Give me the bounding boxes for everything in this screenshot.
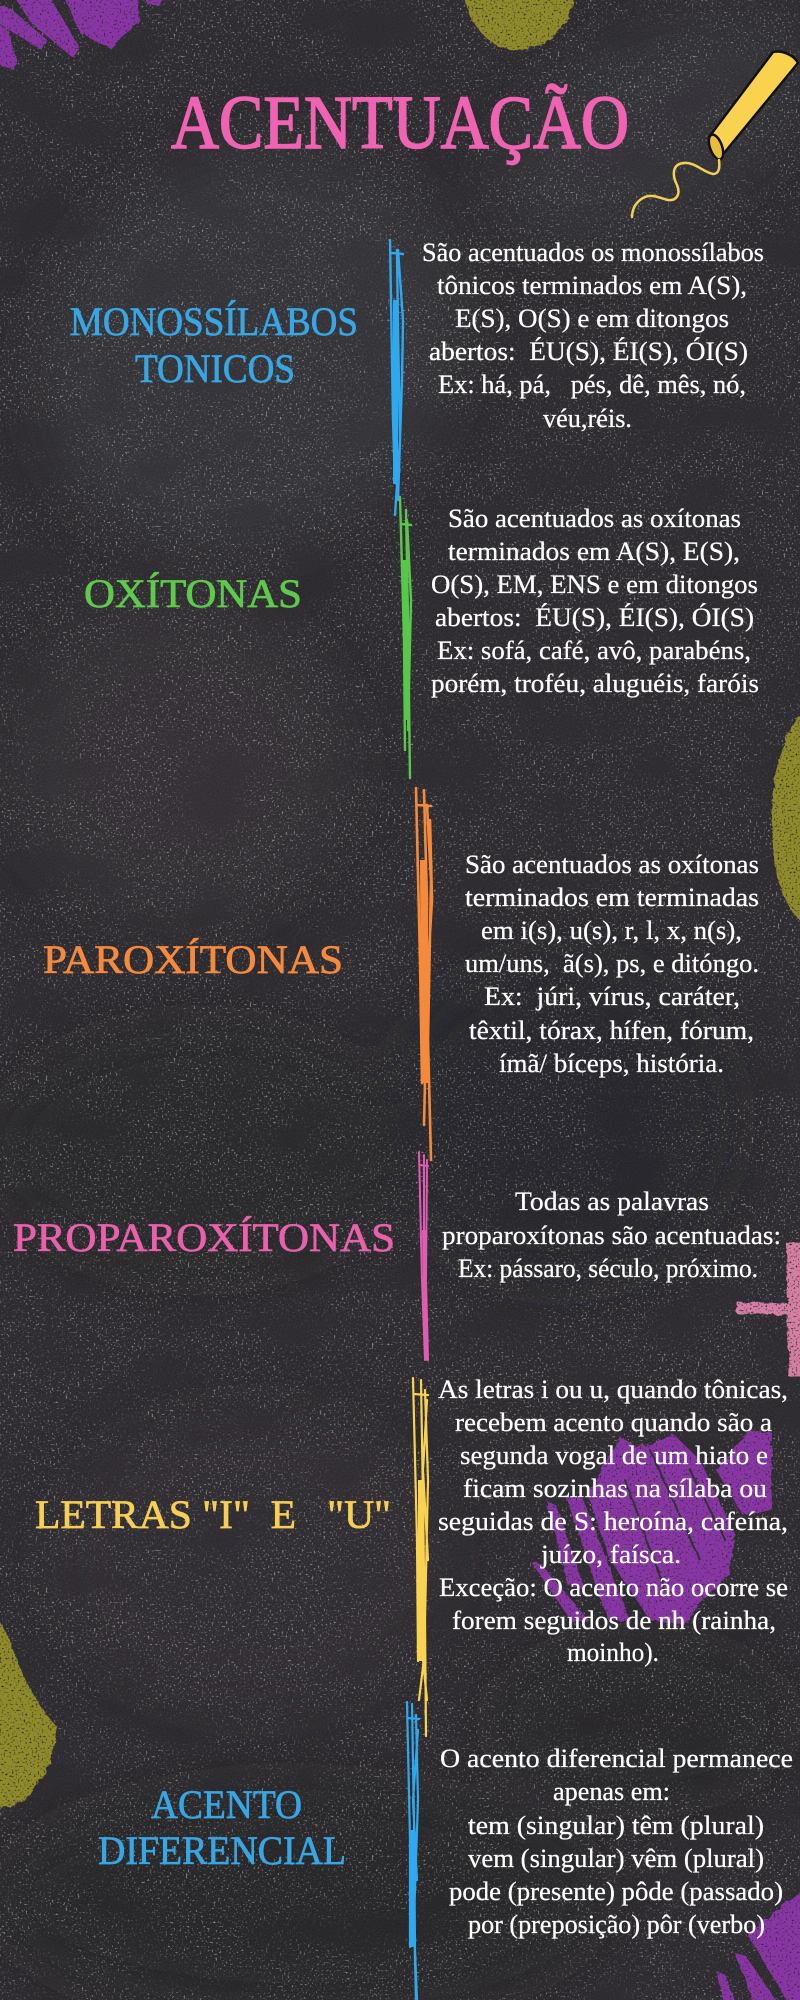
text block: monossílabos: véu,réis.: [543, 404, 632, 433]
text block: paroxítonas: um/uns, ã(s), ps, e ditóngo.: [465, 949, 759, 978]
decoration: purple chalk scribble top left: [0, 0, 165, 70]
text block: paroxítonas: Ex: júri, vírus, caráter,: [484, 982, 740, 1011]
heading: paroxítonas: PAROXÍTONAS: [43, 937, 343, 982]
text block: letras i e u: seguidas de S: heroína, cafeína,: [438, 1507, 788, 1536]
text block: paroxítonas: têxtil, tórax, hífen, fórum,: [469, 1016, 754, 1045]
decoration: purple chalk scribble bottom right: [717, 1890, 800, 2000]
divider: blue chalk line: [390, 240, 403, 515]
text block: letras i e u: Exceção: O acento não ocorre se: [439, 1573, 788, 1602]
text block: oxítonas: terminados em A(S), E(S),: [448, 537, 740, 566]
text block: acento diferencial: apenas em:: [553, 1777, 670, 1806]
text block: acento diferencial: tem (singular) têm (plural): [468, 1811, 764, 1840]
text block: monossílabos: [422, 238, 764, 433]
text block: paroxítonas: São acentuados as oxítonas: [465, 850, 759, 879]
text block: acento diferencial: O acento diferencial permanece: [440, 1744, 793, 1773]
heading: monossílabos tônicos: [70, 299, 358, 391]
text block: monossílabos: São acentuados os monossílabos: [422, 238, 764, 267]
heading: monossílabos tônicos: TONICOS: [135, 346, 295, 391]
heading: proparoxítonas: PROPAROXÍTONAS: [13, 1215, 395, 1260]
text block: oxítonas: São acentuados as oxítonas: [448, 504, 741, 533]
heading: acento diferencial: DIFERENCIAL: [98, 1828, 346, 1873]
text block: oxítonas: porém, troféu, aluguéis, faróis: [431, 669, 759, 698]
heading: acento diferencial: [98, 1782, 346, 1873]
section: acento diferencial: [98, 1702, 793, 2000]
text block: oxítonas: O(S), EM, ENS e em ditongos: [431, 570, 758, 599]
text block: oxítonas: Ex: sofá, café, avô, parabéns,: [437, 636, 751, 665]
section: oxítonas: [84, 497, 759, 778]
text block: oxítonas: [431, 504, 759, 698]
text block: proparoxítonas: proparoxítonas são acentuadas:: [442, 1221, 781, 1250]
heading: letras i e u: LETRAS "I" E "U": [35, 1492, 391, 1537]
decoration: purple chalk scribble centre: [532, 1430, 772, 1625]
text block: letras i e u: moinho).: [567, 1638, 659, 1667]
section: monossílabos tônicos: [70, 238, 764, 515]
divider: green chalk line: [400, 497, 411, 778]
text block: letras i e u: ficam sozinhas na sílaba ou: [463, 1474, 767, 1503]
decoration: pink chalk plus: [737, 1243, 800, 1377]
heading: acento diferencial: ACENTO: [151, 1782, 302, 1827]
heading: oxítonas: OXÍTONAS: [84, 571, 302, 616]
text block: proparoxítonas: Ex: pássaro, século, próximo.: [458, 1254, 758, 1283]
text block: acento diferencial: por (preposição) pôr (verbo): [468, 1910, 765, 1939]
text block: acento diferencial: [440, 1744, 793, 1939]
divider: yellow chalk line: [413, 1378, 428, 1736]
text block: oxítonas: abertos: ÉU(S), ÉI(S), ÓI(S): [435, 603, 754, 632]
decoration: olive chalk blob top: [464, 0, 574, 50]
section: paroxítonas: [43, 788, 759, 1160]
text block: letras i e u: segunda vogal de um hiato e: [460, 1441, 768, 1470]
text block: monossílabos: E(S), O(S) e em ditongos: [455, 304, 729, 333]
divider: blue chalk line: [407, 1702, 419, 2000]
section: proparoxítonas: [13, 1152, 781, 1360]
decoration: olive chalk blob right: [772, 708, 800, 926]
text block: paroxítonas: [465, 850, 759, 1078]
title: ACENTUAÇÃO: [171, 81, 629, 165]
text block: monossílabos: tônicos terminados em A(S),: [437, 271, 747, 300]
text block: acento diferencial: vem (singular) vêm (plural): [468, 1844, 764, 1873]
text block: letras i e u: As letras i ou u, quando tônicas,: [438, 1375, 788, 1404]
text block: paroxítonas: ímã/ bíceps, história.: [499, 1049, 724, 1078]
text block: monossílabos: Ex: há, pá, pés, dê, mês, nó,: [438, 370, 746, 399]
text block: paroxítonas: em i(s), u(s), r, l, x, n(s),: [481, 916, 742, 945]
divider: orange chalk line: [416, 788, 432, 1160]
text block: proparoxítonas: [442, 1187, 781, 1283]
text block: letras i e u: juízo, faísca.: [540, 1540, 681, 1569]
icon: yellow chalk stick: [632, 52, 798, 217]
text block: monossílabos: abertos: ÉU(S), ÉI(S), ÓI(S): [429, 337, 748, 366]
text block: acento diferencial: pode (presente) pôde (passado): [449, 1877, 783, 1906]
text block: letras i e u: recebem acento quando são a: [455, 1408, 772, 1437]
text block: letras i e u: [438, 1375, 788, 1667]
heading: monossílabos tônicos: MONOSSÍLABOS: [70, 299, 358, 344]
text block: letras i e u: forem seguidos de nh (rainha,: [452, 1606, 776, 1635]
decoration: olive chalk blob left: [0, 1610, 56, 1812]
divider: pink chalk line: [419, 1152, 428, 1360]
text block: paroxítonas: terminados em terminadas: [465, 883, 759, 912]
section: letras i e u: [35, 1375, 788, 1736]
text block: proparoxítonas: Todas as palavras: [515, 1187, 709, 1216]
